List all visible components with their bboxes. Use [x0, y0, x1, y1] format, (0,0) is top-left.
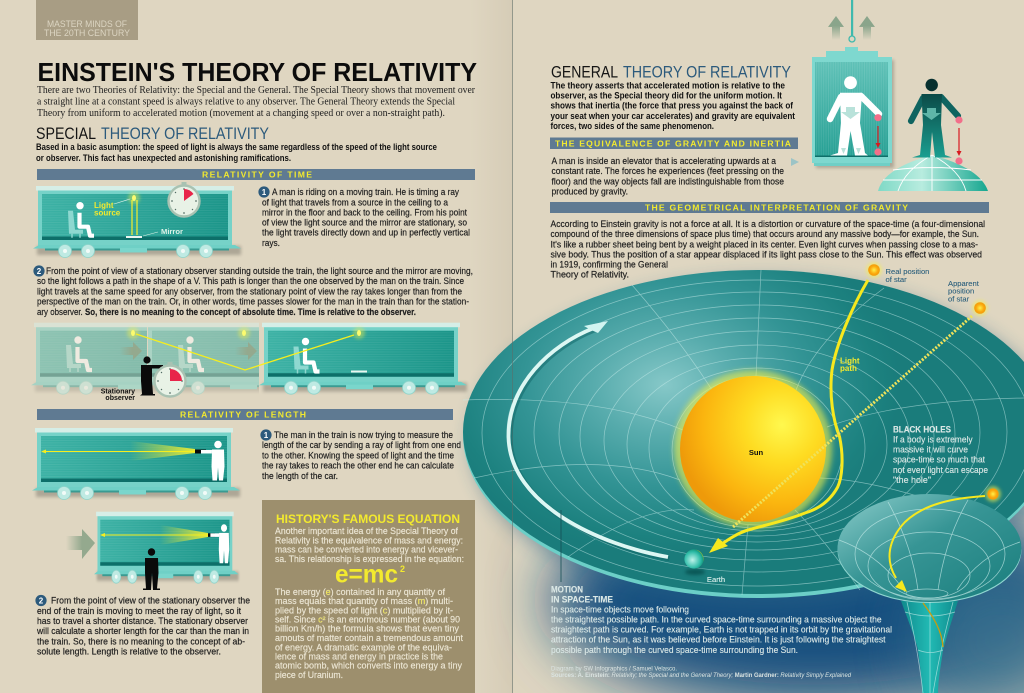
text: length step 1: the ray takes to reach the other end he can calculate	[262, 460, 454, 470]
text: time step 2: light travels at the same speed for any observer, from the stationary point of view the ray takes longer than from the	[37, 286, 462, 296]
equation explanation text: mass equals that quantity of mass ( m) multi-	[275, 596, 453, 606]
text: time step 2: ary observer. So, there is no meaning to the concept of absolute time. Time is relative to the observer.	[37, 307, 416, 317]
text: length step 1: the length of the car.	[262, 471, 338, 481]
text: elevator explanation	[552, 156, 784, 197]
general theory lead text: shows that inertia (the force that press you against the back of	[550, 101, 794, 111]
text: length step 2	[35, 595, 250, 656]
text: time step 1: rays.	[262, 238, 280, 248]
equation intro text: Relativity is the equivalence of mass and energy:	[275, 535, 463, 545]
band: relativity of length: RELATIVITY OF LENGTH	[180, 410, 306, 420]
equation intro text: sa. This relationship is expressed in the equation:	[275, 554, 464, 564]
callout: black holes: space-time so much that	[893, 455, 986, 465]
number badge 1: 1	[264, 431, 269, 440]
seated man	[68, 202, 94, 238]
special theory lead text: Based in a basic asumption: the speed of light is always the same regardless of the speed of the light source	[36, 142, 437, 152]
black hole funnel	[838, 486, 1022, 693]
band: relativity of time: RELATIVITY OF TIME	[202, 170, 312, 180]
text: length step 2: the train. So, there is no meaning to the concept of ab-	[37, 636, 245, 646]
formula: e=mc	[335, 561, 398, 589]
number badge 1: 1	[262, 188, 267, 197]
callout: black holes: If a body is extremely	[893, 434, 973, 444]
upward arrows	[828, 16, 875, 40]
text: elevator explanation: produced by gravity.	[552, 187, 628, 197]
text: geometric interpretation: compound of the three dimensions of space plus time) that occurs around any massive body—for example, the Sun.	[550, 229, 979, 239]
heading: special theory: THEORY OF RELATIVITY	[101, 124, 269, 143]
real star	[866, 262, 882, 278]
text: length step 1	[260, 429, 461, 481]
space-time disc	[463, 270, 1024, 598]
stationary observer label: observer	[105, 395, 135, 402]
ghost train position 1	[31, 322, 147, 395]
equation explanation text: piece of Uranium.	[275, 670, 343, 680]
elevator cable	[849, 0, 855, 42]
man with flashlight	[201, 441, 224, 480]
text: geometric interpretation: in 1919, confirming the General	[550, 260, 668, 270]
text: time step 1	[258, 186, 470, 248]
heading: special theory: SPECIAL	[36, 124, 96, 143]
text: geometric interpretation: sive body. Thus the position of a star appear displaced if its light pass close to the Sun. This effect was observed	[550, 249, 982, 259]
general theory lead text: your seat when your car accelerates) and gravity are equivalent	[550, 111, 795, 121]
stationary observer label	[101, 388, 135, 402]
light rays	[132, 200, 137, 235]
funnel grid	[839, 500, 1020, 693]
light path label: path	[840, 364, 857, 373]
apparent star label: position	[948, 287, 974, 296]
text: geometric interpretation: It's like a rubber sheet being bent by a weight placed in its center. Even light curves when passing close to a mas-	[550, 239, 978, 249]
stopwatch	[168, 182, 200, 216]
apparent star label: of star	[948, 294, 970, 303]
formula: 2	[400, 564, 405, 574]
sun: Sun	[749, 448, 764, 457]
motion in space-time text: attraction of the Sun, as it was believed before Einstein. It is just following the straightest	[551, 635, 886, 645]
light source label	[94, 199, 130, 218]
section tag: THE 20TH CENTURY	[44, 28, 130, 38]
motion in space-time text: IN SPACE-TIME	[551, 594, 613, 604]
text: time step 1: of view the light source and the mirror are stationary, so	[262, 218, 467, 228]
elevator illustration	[812, 0, 988, 191]
motion in space-time text: straightest path is curved. For example, Earth is not trapped in its orbit by the gravitational	[551, 625, 892, 635]
text: length step 2: will calculate a shorter length for the car than the man in	[36, 626, 249, 636]
light path label: Light	[840, 356, 860, 366]
train diagram 2: moving train seen by stationary observer	[31, 323, 467, 402]
special theory lead text: or observer. This fact has unexpected and astonishing ramifications.	[36, 153, 291, 163]
flashlight beam	[160, 525, 208, 545]
text: time step 1: mirror in the floor and back to the ceiling. From his point	[262, 207, 467, 217]
text: time step 1: A man is riding on a moving train. He is timing a ray	[272, 187, 459, 197]
text: geometric interpretation	[550, 219, 985, 280]
band: relativity of time	[37, 169, 475, 180]
text: length step 1: to the other. Knowing the speed of light and the time	[262, 450, 454, 460]
flashlight beam	[130, 441, 195, 461]
band: equivalence of gravity and inertia: THE EQUIVALENCE OF GRAVITY AND INERTIA	[555, 138, 791, 148]
text: length step 1: length of the car by sending a ray of light from one end	[262, 440, 461, 450]
real star label: of star	[886, 275, 907, 284]
text: elevator explanation: constant rate. The forces he experiences (feet pressing on the	[552, 166, 784, 176]
equation explanation text: lence of mass and energy in practice is the	[275, 651, 443, 661]
equation explanation text: of energy. A dramatic example of the equiva-	[275, 642, 452, 652]
number badge 1	[260, 429, 272, 441]
text: geometric interpretation: Theory of Relativity.	[550, 270, 629, 280]
special theory lead text	[36, 142, 437, 163]
equation intro text: mass can be converted into energy and vicever-	[275, 545, 458, 555]
light sources	[127, 327, 365, 339]
section tag	[36, 0, 138, 40]
band: geometrical interpretation of gravity: THE GEOMETRICAL INTERPRETATION OF GRAVITY	[645, 203, 908, 213]
V-shaped light path	[136, 334, 354, 370]
motion arrow 1	[120, 342, 142, 360]
introduction text: There are two Theories of Relativity: the Special and the General. The Special Theory shows that movement over	[37, 84, 475, 96]
callout: black holes: BLACK HOLES	[893, 424, 951, 434]
apparent star label: Apparent	[948, 279, 980, 288]
train diagram 3: measuring the car	[32, 428, 240, 500]
equation intro text: Another important idea of the Special Theory of	[275, 526, 459, 536]
blue shadow beneath the space-time disc	[470, 277, 1024, 693]
motion in space-time text: the straightest possible path. In the curved space-time surrounding a massive object the	[551, 614, 882, 624]
title: EINSTEIN'S THEORY OF RELATIVITY	[38, 57, 477, 87]
number badge 2: 2	[37, 267, 42, 276]
earth label: Earth	[707, 575, 725, 584]
earth	[684, 549, 705, 575]
text: length step 2: has to travel a shorter distance. The stationary observer	[37, 616, 248, 626]
apparent light path	[733, 316, 972, 527]
seated man on train	[294, 338, 320, 374]
train diagram 4: contracted train	[66, 512, 239, 590]
light path label	[840, 356, 860, 373]
callout line	[560, 510, 562, 582]
light ray	[100, 533, 208, 537]
ghost train position 2	[147, 322, 259, 395]
mirror label	[143, 227, 183, 236]
introduction text: Theory from uniform to accelerated motion (movement at a changing speed or over a non-straight path).	[37, 107, 445, 119]
falling ball on earth	[955, 116, 963, 165]
text: length step 2: solute length. Length is relative to the observer.	[37, 646, 221, 656]
text: time step 1: the light travels directly down and up in perfectly vertical	[262, 228, 470, 238]
light source label: Light	[94, 201, 114, 210]
falling ball in elevator	[874, 114, 882, 156]
motion arrow	[66, 529, 95, 559]
heading: general theory: THEORY OF RELATIVITY	[623, 62, 791, 81]
number badge 2	[35, 595, 47, 606]
man with flashlight	[210, 524, 229, 563]
apparent star	[972, 300, 988, 316]
equation heading: HISTORY'S FAMOUS EQUATION	[276, 514, 460, 526]
equation explanation text: billion Km/h) the formula shows that even tiny	[275, 624, 460, 634]
space-time grid	[463, 270, 1024, 595]
light ray	[41, 450, 195, 454]
motion in space-time text: In space-time objects move following	[551, 604, 689, 614]
text: length step 1: The man in the train is now trying to measure the	[274, 430, 453, 440]
path of light into black hole	[890, 496, 985, 647]
mirror label: Mirror	[161, 227, 183, 236]
equation explanation text: self. Since c² is an enormous number (about 90	[275, 615, 460, 625]
elevator cabin	[812, 47, 894, 168]
earth dome	[878, 155, 988, 191]
text: time step 2: From the point of view of a stationary observer standing outside the train, the light source and the mirror are moving,	[46, 266, 473, 276]
white man in elevator	[830, 76, 879, 156]
motion in space-time text	[551, 584, 892, 655]
equation explanation text: The energy (e) contained in any quantity of	[275, 587, 446, 597]
funnel tube	[901, 601, 958, 693]
heading: general theory: GENERAL	[551, 62, 618, 81]
text: elevator explanation: floor) and the way objects fall are indistinguishable from those	[552, 176, 784, 186]
general theory lead text: The theory asserts that accelerated motion is relative to the	[550, 80, 785, 90]
general theory lead text	[550, 80, 795, 131]
number badge 2: 2	[39, 596, 44, 606]
arrow: elevator to earth comparison	[791, 158, 799, 166]
funnel mouth	[838, 497, 1022, 603]
equation intro text	[275, 526, 464, 564]
heading: general theory	[551, 62, 791, 81]
stopwatch	[154, 362, 186, 396]
sun	[674, 370, 832, 528]
flashlight	[208, 533, 215, 537]
number badge 1	[258, 186, 270, 198]
text: time step 1: of light that travels from a source in the ceiling to a	[262, 197, 449, 207]
introduction text: a straight line at a constant speed is always relative to any observer. The General Theory extends the Special	[37, 96, 455, 108]
heading: special theory	[36, 124, 269, 143]
flashlight	[195, 450, 206, 454]
number badge 2	[33, 265, 45, 277]
stationary observer	[143, 548, 160, 590]
text: length step 2: From the point of view of the stationary observer the	[51, 596, 250, 606]
real star label	[886, 267, 929, 284]
callout: black holes: not even light can escape	[893, 465, 988, 475]
star falling into black hole	[985, 486, 1001, 502]
dark man on earth	[911, 79, 958, 158]
band: relativity of length	[37, 409, 453, 420]
equation explanation text: amouts of matter contain a tremendous amount	[275, 633, 464, 643]
stationary observer	[140, 356, 163, 396]
callout: black holes	[893, 424, 988, 485]
text: time step 2: so the light follows a path in the shape of a V. This path is longer than the one observed by the man on the train. Since	[37, 276, 464, 286]
credits	[551, 666, 851, 679]
mirror	[351, 370, 367, 372]
text: geometric interpretation: According to Einstein gravity is not a force at all. It is a distortion or curvature of the space-time (a four-dimensional	[550, 219, 985, 229]
callout: black holes: "the hole"	[893, 475, 931, 485]
equation explanation text: atomic bomb, which converts into energy a tiny	[275, 661, 463, 671]
callout: black holes: massive it will curve	[893, 444, 968, 454]
introduction text	[37, 84, 475, 119]
orbit arrow	[508, 321, 670, 558]
real light path	[709, 280, 868, 553]
text: elevator explanation: A man is inside an elevator that is accelerating upwards at a	[552, 156, 777, 166]
vertical page fold line	[512, 0, 513, 693]
band: geometrical interpretation of gravity	[550, 202, 989, 213]
section tag: MASTER MINDS OF	[47, 19, 128, 29]
general theory lead text: forces, two sides of the same phenomenon.	[550, 121, 714, 131]
text: time step 2: perspective of the man on the train. Or, in other words, time passes slower for the man in the train than for the station-	[37, 296, 469, 306]
train at final position	[259, 323, 467, 394]
train diagram 1: light source and mirror	[33, 182, 241, 258]
apparent star label	[948, 279, 980, 303]
panel: history's famous equation	[262, 500, 475, 693]
light source bulb	[128, 192, 140, 204]
text: length step 2: end of the train is moving to meet the ray of light, so it	[37, 606, 241, 616]
equation explanation text: plied by the speed of light ( c) multiplied by it-	[275, 605, 453, 615]
light source label: source	[94, 208, 121, 218]
mirror	[126, 236, 142, 238]
credits: Diagram by SW Infographics / Samuel Velasco.	[551, 666, 677, 672]
real star label: Real position	[886, 267, 929, 276]
equation explanation text	[275, 587, 464, 680]
general theory lead text: observer, as the Special theory did for the uniform motion. It	[550, 91, 782, 101]
stationary observer label: Stationary	[101, 388, 135, 396]
motion in space-time text: MOTION	[551, 584, 583, 594]
motion in space-time text: possible path through the curved space-time surrounding the Sun.	[551, 645, 798, 655]
motion arrow 2	[235, 342, 257, 360]
text: time step 2	[33, 265, 473, 317]
credits: Sources: A. Einstein: Relativity; the Special and the General Theory; Martin Gardner: Relativity Simply Explained	[551, 672, 851, 679]
